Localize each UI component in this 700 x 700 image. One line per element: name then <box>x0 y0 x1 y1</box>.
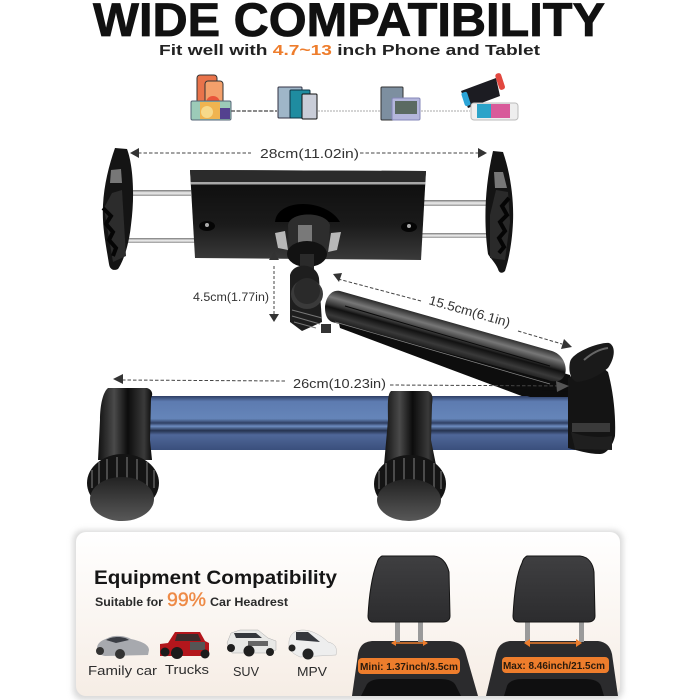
panel heading: Equipment Compatibility <box>94 568 337 589</box>
car type labels: Family car <box>88 663 158 678</box>
device size scale line <box>231 110 470 112</box>
icon: MPV <box>288 630 336 660</box>
dimension: arm length 15.5cm <box>333 273 572 349</box>
icon: game console <box>461 72 518 120</box>
left knob <box>87 454 159 521</box>
tablet holder <box>103 148 513 273</box>
panel subheading end: Car Headrest <box>210 597 288 609</box>
subtitle: Fit well with 4.7~13 inch Phone and Tablet <box>159 42 540 59</box>
panel subheading: Suitable for <box>95 597 164 609</box>
left clamp <box>103 148 133 270</box>
middle clip <box>384 391 436 465</box>
dimension: joint height 4.5cm: 4.5cm(1.77in) <box>193 292 269 304</box>
middle knob <box>374 455 446 521</box>
dimension: clamp width 28cm: 28cm(11.02in) <box>260 146 359 161</box>
highlight: 99%: 99% <box>167 590 206 611</box>
rods <box>123 190 496 243</box>
mounting plate <box>190 170 426 260</box>
headrest: maximum spacing <box>486 556 618 696</box>
icon: SUV <box>227 630 276 656</box>
lower arm <box>334 302 575 398</box>
screw holes <box>199 221 215 231</box>
right end clamp <box>568 362 615 454</box>
right clamp <box>485 151 513 273</box>
car type labels: MPV <box>297 664 327 679</box>
headrest bar <box>87 343 615 521</box>
label: minimum spacing: Mini: 1.37inch/3.5cm <box>360 661 458 673</box>
elbow link <box>290 266 322 331</box>
icon: tablets <box>278 87 317 119</box>
arm knuckle <box>569 343 614 382</box>
dimension: arm length 15.5cm: 15.5cm(6.1in) <box>427 292 512 330</box>
car type labels <box>88 662 327 679</box>
dimension: clamp width 28cm <box>130 146 487 161</box>
label: maximum spacing: Max: 8.46inch/21.5cm <box>503 660 605 672</box>
blue tube <box>150 396 575 450</box>
ball joint <box>275 204 340 222</box>
dimension: bar length 26cm <box>113 374 569 392</box>
panel: equipment compatibility <box>73 530 623 700</box>
articulated arm <box>290 266 575 398</box>
icon: tablet and handheld <box>381 87 420 120</box>
dimension: bar length 26cm: 26cm(10.23in) <box>293 376 386 391</box>
car type labels: SUV <box>233 664 259 679</box>
icon: truck <box>160 632 210 659</box>
headrest: minimum spacing <box>352 556 478 696</box>
icon: phones <box>191 75 231 120</box>
icon: family car <box>96 636 149 659</box>
left clip <box>98 388 152 460</box>
long arm body <box>325 291 566 381</box>
dimension: joint height 4.5cm <box>193 252 279 322</box>
car type labels: Trucks <box>165 662 210 677</box>
